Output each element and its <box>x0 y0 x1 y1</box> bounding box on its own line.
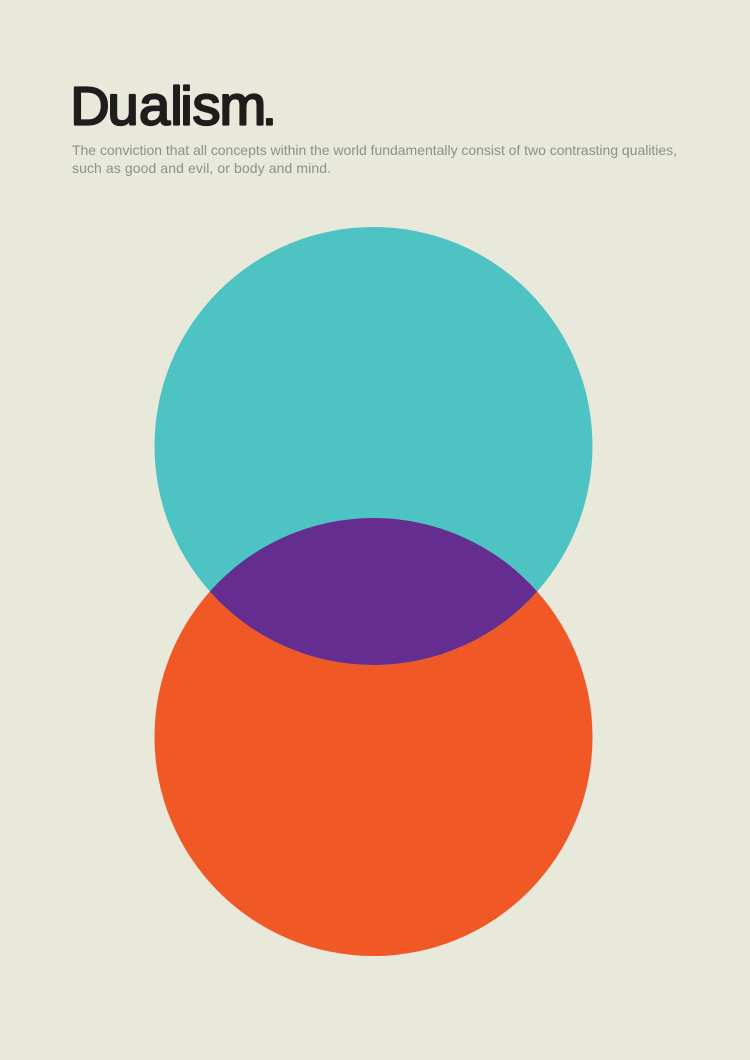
description text: such as good and evil, or body and mind. <box>72 160 331 176</box>
overlap: purple lens <box>210 518 537 665</box>
description text <box>72 142 677 176</box>
title: sm <box>192 74 266 136</box>
title: . <box>262 80 276 136</box>
title: li <box>170 76 192 136</box>
title: D <box>70 76 110 136</box>
circle: teal upper <box>154 227 592 665</box>
description text: The conviction that all concepts within the world fundamentally consist of two contrasting qualities, <box>72 142 677 158</box>
title: ua <box>108 74 171 136</box>
circle: orange lower <box>154 518 592 956</box>
venn diagram <box>154 227 592 956</box>
